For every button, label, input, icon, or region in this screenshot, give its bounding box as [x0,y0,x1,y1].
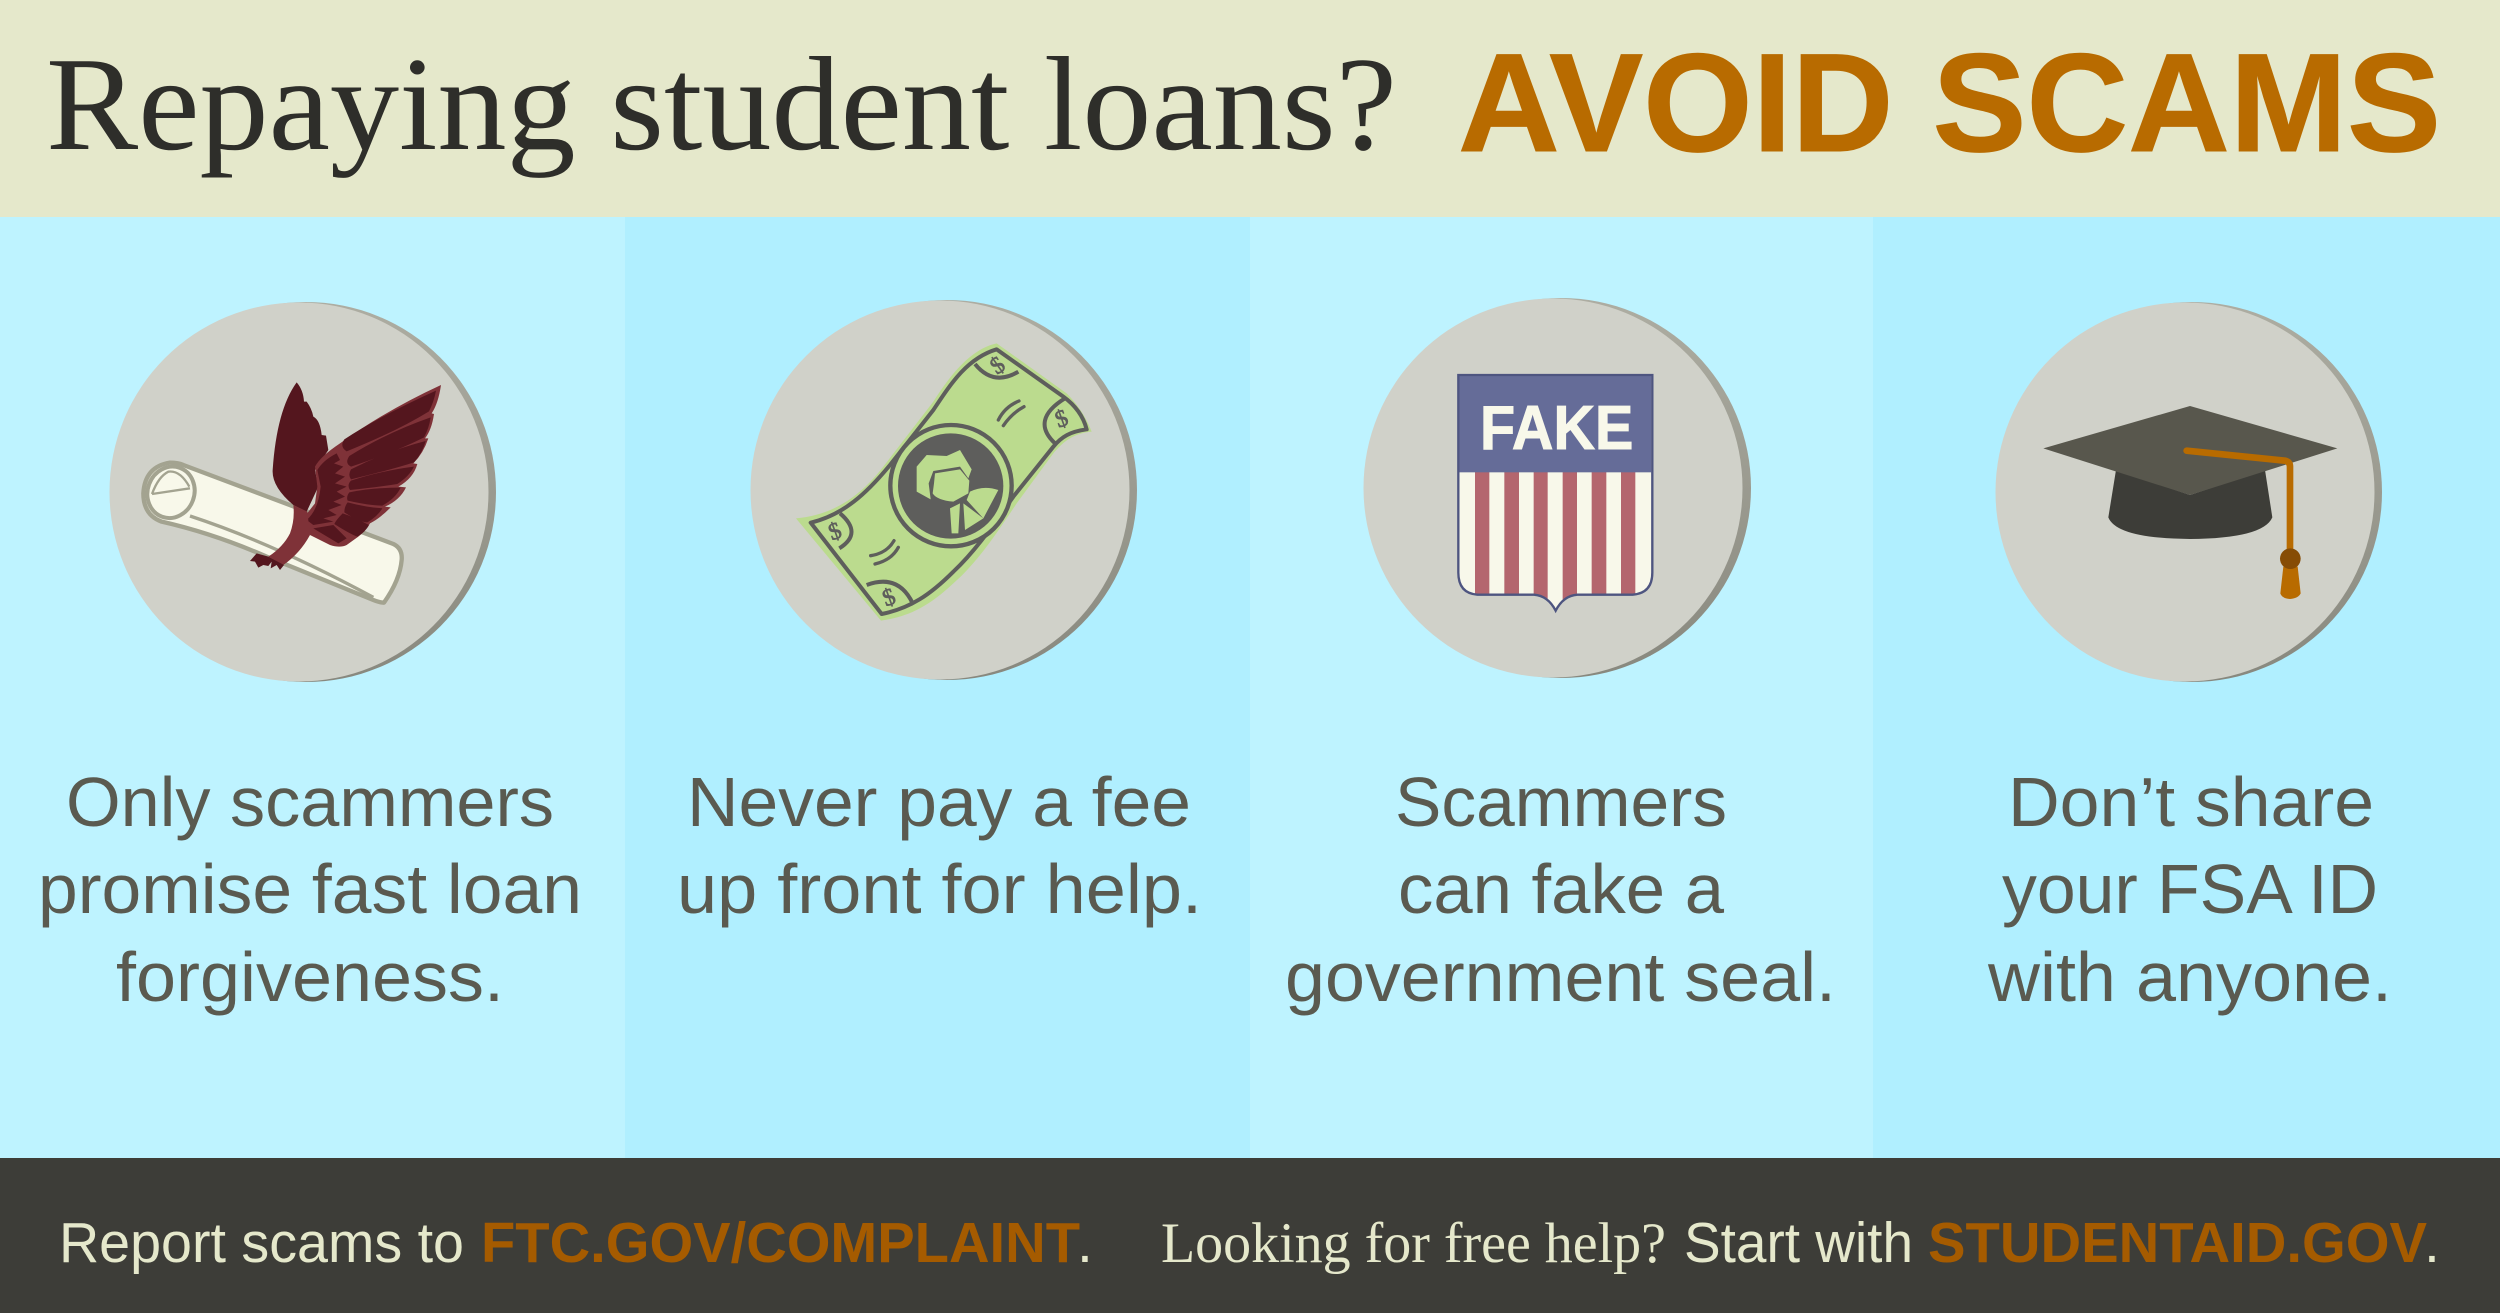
caption: fake government seal [1285,763,1836,1016]
icon: dollar bill [750,300,1137,680]
footer: free help: Looking for free help? [1161,1212,1666,1275]
footer: report scams: Report scams to [59,1211,464,1275]
icon: dollar bill: $ [825,518,845,546]
footer band [0,1158,2500,1313]
caption: never pay a fee: Never pay a fee [687,763,1191,841]
caption: don't share FSA ID [1987,763,2392,1016]
caption: scammers promise forgiveness: Only scammers [66,763,554,841]
footer: report scams: FTC.GOV/COMPLAINT [481,1211,1080,1275]
caption: scammers promise forgiveness: forgiveness. [116,938,504,1016]
footer: free help: . [2424,1211,2440,1275]
caption: never pay a fee: up front for help. [677,850,1202,928]
header band [0,0,2500,217]
footer: free help: Start with [1684,1211,1913,1275]
footer: report scams [59,1211,1093,1275]
panel: scammers promise forgiveness [0,217,625,1159]
icon: graduation cap [1996,302,2382,682]
caption: don't share FSA ID: with anyone. [1987,938,2392,1016]
panel: don't share FSA ID [1873,217,2500,1159]
caption: don't share FSA ID: Don’t share [2008,763,2374,841]
icon: dollar bill: $ [985,352,1010,380]
icon: diploma with wings [110,302,496,682]
panel: fake government seal [1288,298,1830,1016]
caption: never pay a fee [677,763,1202,928]
footer: free help [1161,1211,2440,1275]
icon: dollar bill: $ [879,584,899,612]
caption: fake government seal: government seal. [1285,938,1836,1016]
title: avoid scams: AVOID SCAMS [1458,24,2441,181]
panel: never pay a fee [625,217,1250,1159]
caption: don't share FSA ID: your FSA ID [2002,850,2378,928]
footer: free help: STUDENTAID.GOV [1928,1211,2427,1275]
icon: fake shield: FAKE [1480,394,1633,463]
footer: report scams: . [1077,1211,1093,1275]
caption: fake government seal: can fake a [1398,850,1724,928]
caption: scammers promise forgiveness [38,763,582,1016]
icon: dollar bill: $ [1052,405,1072,434]
title: repaying student loans: Repaying student loans? [46,30,1397,178]
caption: fake government seal: Scammers [1395,763,1727,841]
icon: fake shield [1364,298,1751,678]
caption: scammers promise forgiveness: promise fast loan [38,850,582,928]
